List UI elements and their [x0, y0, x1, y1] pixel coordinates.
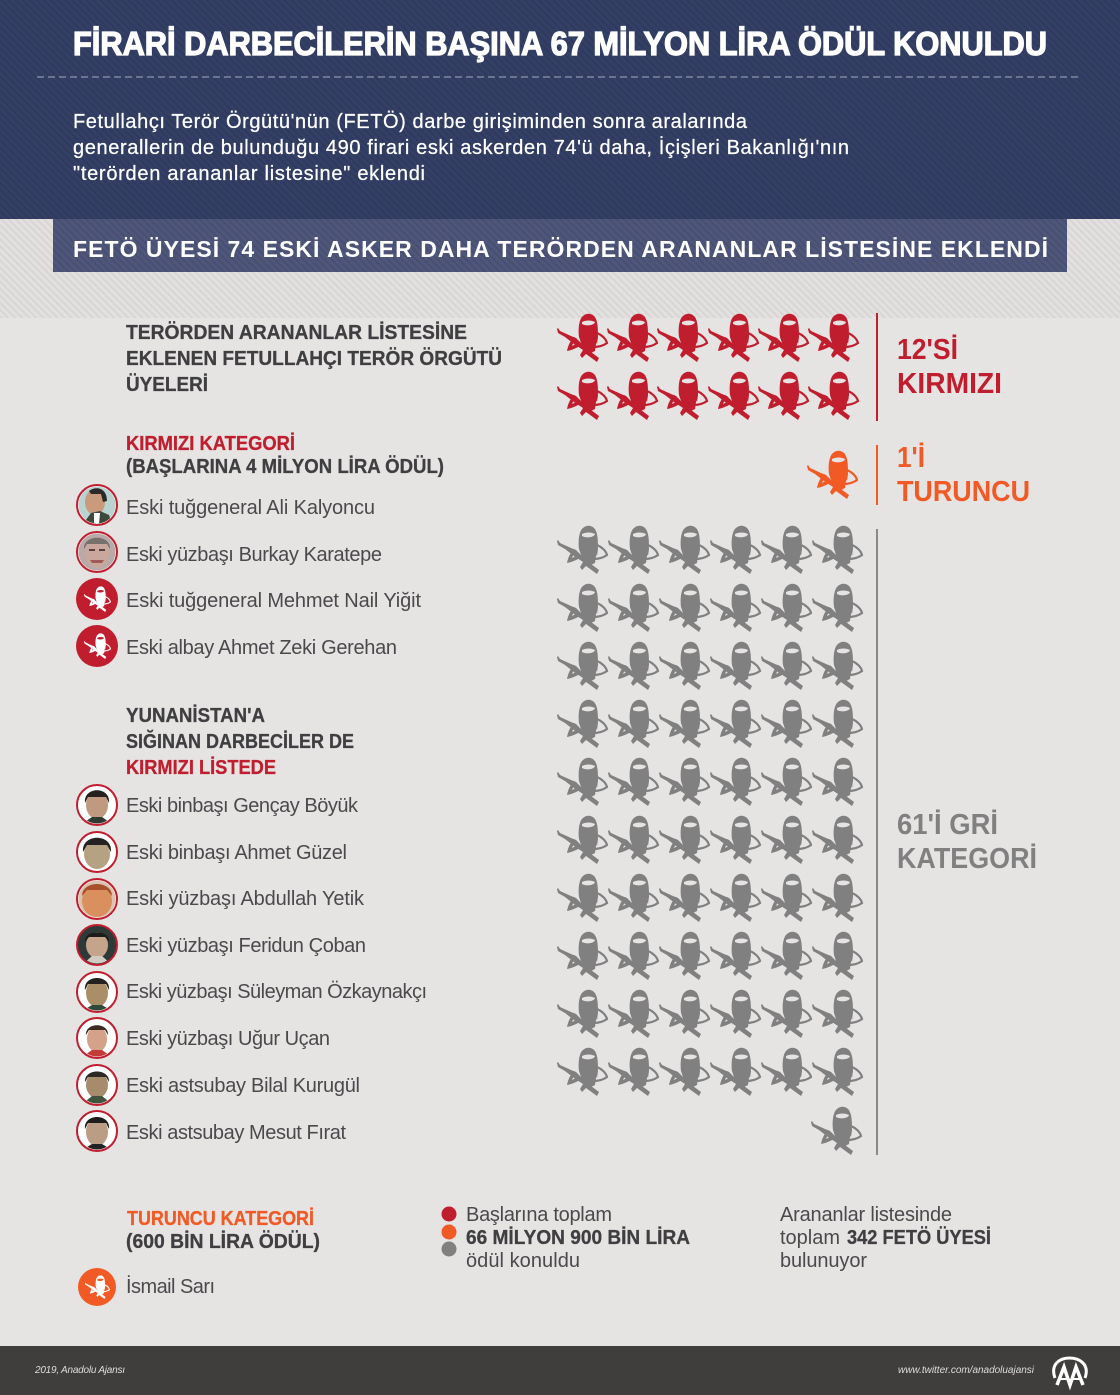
- red category list: [76, 485, 421, 667]
- red count label: 12'Sİ: [897, 334, 958, 366]
- orange count label: 1'İ: [897, 442, 925, 474]
- portrait: Feridun Çoban: [77, 925, 117, 965]
- footer: www.twitter.com/anadoluajansi: [898, 1365, 1035, 1376]
- icon: İsmail Sarı: [78, 1268, 116, 1306]
- Greece list: Eski yüzbaşı Uğur Uçan: [126, 1028, 330, 1050]
- gray figures: [557, 526, 862, 1155]
- orange category: [78, 1207, 320, 1306]
- Greece list: Eski astsubay Bilal Kurugül: [126, 1075, 360, 1097]
- subtitle band: [53, 219, 1067, 272]
- intro text: "terörden arananlar listesine" eklendi: [73, 163, 425, 185]
- red figures: [557, 314, 858, 420]
- heading: red category: [126, 432, 444, 478]
- red category list: Eski yüzbaşı Burkay Karatepe: [126, 544, 382, 566]
- heading: listed members: TERÖRDEN ARANANLAR LİSTESİNE: [126, 321, 467, 344]
- portrait: Ali Kalyoncu: [77, 485, 117, 525]
- total wanted callout: 342 FETÖ ÜYESİ: [847, 1226, 991, 1249]
- total wanted callout: bulunuyor: [780, 1250, 867, 1272]
- intro text: [73, 111, 849, 185]
- Greece list: [77, 785, 427, 1151]
- portrait: Gençay Böyük: [77, 785, 117, 825]
- heading: fled to Greece: [126, 704, 354, 779]
- total wanted callout: Arananlar listesinde: [780, 1204, 952, 1226]
- orange category: (600 BİN LİRA ÖDÜL): [126, 1230, 320, 1253]
- red count label: KIRMIZI: [897, 368, 1002, 400]
- Greece list: Eski yüzbaşı Süleyman Özkaynakçı: [126, 981, 427, 1003]
- orange figure: [807, 451, 857, 499]
- Greece list: Eski yüzbaşı Abdullah Yetik: [126, 888, 365, 910]
- orange category: TURUNCU KATEGORİ: [127, 1207, 314, 1230]
- gray count label: KATEGORİ: [897, 843, 1037, 875]
- intro text: Fetullahçı Terör Örgütü'nün (FETÖ) darbe girişiminden sonra aralarında: [73, 111, 748, 133]
- names: Eski binbaşı Gençay Böyük: [126, 795, 359, 817]
- intro text: generallerin de bulunduğu 490 firari eski askerden 74'ü daha, İçişleri Bakanlığı'nın: [73, 136, 849, 159]
- subtitle band: FETÖ ÜYESİ 74 ESKİ ASKER DAHA TERÖRDEN ARANANLAR LİSTESİNE EKLENDİ: [73, 236, 1048, 262]
- heading: listed members: ÜYELERİ: [126, 373, 208, 396]
- heading: listed members: [126, 321, 502, 396]
- orange category: İsmail Sarı: [126, 1275, 215, 1298]
- red category list: Eski tuğgeneral Mehmet Nail Yiğit: [126, 590, 421, 612]
- red count label: [876, 313, 1002, 421]
- heading: fled to Greece: KIRMIZI LİSTEDE: [126, 756, 276, 779]
- icon: Ahmet Zeki Gerehan: [76, 625, 118, 667]
- total wanted callout: toplam: [780, 1227, 840, 1249]
- gray count label: [876, 529, 1037, 1155]
- red category list: Eski albay Ahmet Zeki Gerehan: [126, 637, 397, 659]
- striped background band: [0, 219, 1120, 318]
- orange count label: [876, 442, 1030, 508]
- heading: listed members: EKLENEN FETULLAHÇI TERÖR ÖRGÜTÜ: [126, 347, 502, 370]
- portrait: Mesut Fırat: [77, 1111, 117, 1151]
- title: FİRARİ DARBECİLERİN BAŞINA 67 MİLYON LİRA ÖDÜL KONULDU: [73, 25, 1047, 62]
- Greece list: Eski binbaşı Ahmet Güzel: [126, 842, 347, 864]
- reward total callout: ödül konuldu: [466, 1250, 580, 1272]
- footer: 2019, Anadolu Ajansı: [34, 1365, 125, 1376]
- reward total callout: Başlarına toplam: [466, 1204, 612, 1226]
- portrait: Abdullah Yetik: [77, 879, 117, 919]
- legend dots: [442, 1206, 456, 1256]
- reward total callout: 66 MİLYON 900 BİN LİRA: [466, 1226, 690, 1249]
- portrait: Bilal Kurugül: [77, 1065, 117, 1105]
- heading: red category: KIRMIZI KATEGORİ: [126, 432, 295, 455]
- gray count label: 61'İ GRİ: [897, 809, 998, 841]
- icon: Mehmet Nail Yiğit: [76, 578, 118, 620]
- icon: AA logo: [1054, 1358, 1086, 1385]
- portrait: Uğur Uçan: [77, 1018, 117, 1058]
- heading: red category: (BAŞLARINA 4 MİLYON LİRA ÖDÜL): [126, 455, 444, 478]
- total wanted callout: [780, 1204, 991, 1272]
- header panel: [0, 0, 1120, 219]
- Greece list: Eski astsubay Mesut Fırat: [126, 1122, 346, 1144]
- orange count label: TURUNCU: [897, 476, 1030, 508]
- portrait: Ahmet Güzel: [77, 832, 117, 872]
- footer: [0, 1346, 1120, 1395]
- portrait: Süleyman Özkaynakçı: [77, 972, 117, 1012]
- Greece list: Eski yüzbaşı Feridun Çoban: [126, 935, 366, 957]
- reward total callout: [442, 1204, 690, 1272]
- heading: fled to Greece: SIĞINAN DARBECİLER DE: [126, 729, 354, 753]
- names: Eski tuğgeneral Ali Kalyoncu: [126, 497, 375, 519]
- portrait: Burkay Karatepe: [77, 532, 117, 572]
- heading: fled to Greece: YUNANİSTAN'A: [126, 704, 265, 727]
